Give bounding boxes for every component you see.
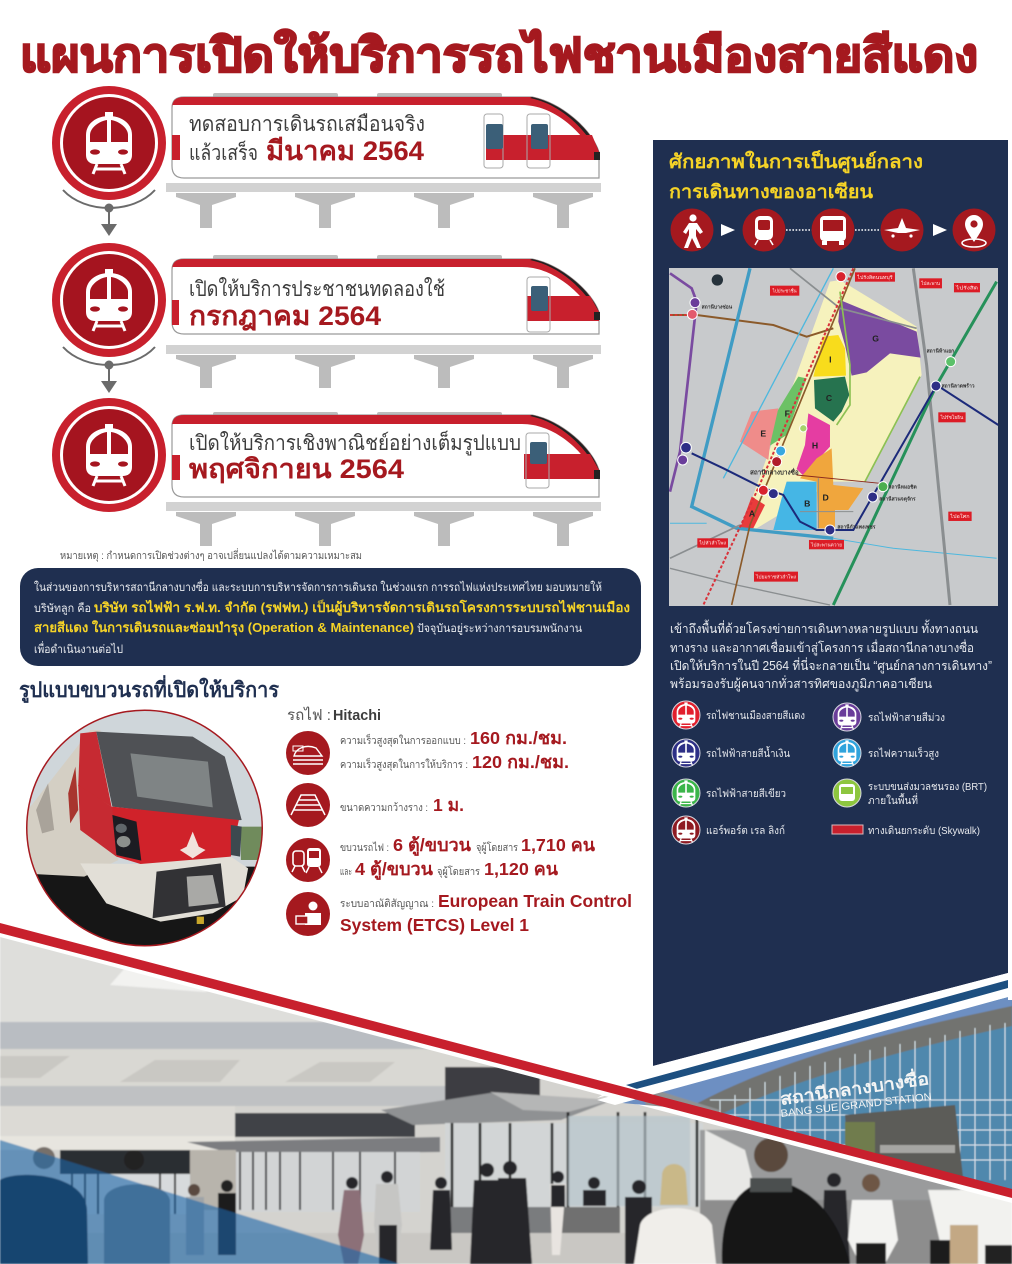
map: station names: สถานีสวนจตุจักร (879, 496, 916, 503)
icon: signalling (286, 892, 330, 936)
legend: airport rail link: แอร์พอร์ต เรล ลิงก์ (706, 824, 785, 837)
heading: train format: รูปแบบขบวนรถที่เปิดให้บริการ (19, 674, 280, 704)
legend (672, 701, 987, 844)
map: station markers (678, 272, 956, 535)
text: carriages (340, 835, 595, 881)
text: hub description: เข้าถึงพื้นที่ด้วยโครงข่ายการเดินทางหลายรูปแบบ ทั้งทางถนน (670, 619, 978, 637)
label: manufacturer: รถไฟ : (287, 706, 331, 724)
panel: operator info: บริษัท รถไฟฟ้า ร.ฟ.ท. จำกัด (รฟฟท.) เป็นผู้บริหารจัดการเดินรถโครงการระบบรถไฟชานเมือง (94, 598, 630, 616)
legend: red line (672, 701, 805, 729)
text: carriages: และ (340, 866, 352, 878)
map: station names: สถานีหมอชิต (888, 483, 917, 490)
legend: BRT: ภายในพื้นที่ (868, 793, 918, 807)
text: speed: 160 กม./ชม. (470, 728, 567, 748)
icon: train (742, 208, 786, 252)
text: signalling: ระบบอาณัติสัญญาณ : (340, 898, 434, 910)
text: station sign: BANG SUE GRAND STATION (780, 1091, 932, 1120)
map: zone letters: F (785, 409, 790, 419)
text: step 1 (189, 113, 425, 166)
legend: green line: รถไฟฟ้าสายสีเขียว (706, 787, 786, 800)
legend: BRT (833, 779, 987, 807)
map: station names: สถานีห้าแยก (927, 347, 954, 354)
label: manufacturer: Hitachi (333, 708, 381, 724)
legend: purple line (833, 703, 945, 731)
text: hub description: พร้อมรองรับผู้คนจากทั่วสารทิศของภูมิภาคอาเซียน (670, 675, 932, 692)
icon: train circle 1 (52, 86, 166, 200)
map: red tags: ไปสะพานควาย (810, 541, 842, 547)
map: zone letters: B (804, 499, 810, 509)
legend: airport rail link (672, 816, 785, 844)
legend: skywalk: ทางเดินยกระดับ (Skywalk) (868, 825, 980, 837)
map: red tags: ไปรังสิตนนทบุรี (856, 274, 893, 281)
map: routes (670, 268, 998, 605)
text: carriages: 1,120 คน (484, 859, 558, 879)
heading: ASEAN hub: ศักยภาพในการเป็นศูนย์กลาง (669, 149, 923, 174)
text: step 2: เปิดให้บริการประชาชนทดลองใช้ (189, 277, 445, 301)
map: red tags: ไปยมราชหัวลำโพง (755, 574, 796, 580)
icon: track (286, 783, 330, 827)
text: step 1: มีนาคม 2564 (266, 136, 424, 166)
label: manufacturer (287, 706, 381, 724)
text: carriages: 4 ตู้/ขบวน (355, 859, 433, 881)
text: hub description (670, 619, 992, 692)
panel: operator info: ปัจจุบันอยู่ระหว่างการอบรมพนักงาน (417, 623, 582, 635)
icon: carriages (286, 838, 330, 882)
map: red tags: ไปประชาชื่น (772, 288, 797, 294)
legend: purple line: รถไฟฟ้าสายสีม่วง (868, 711, 945, 724)
text: carriages: จุผู้โดยสาร (437, 865, 480, 878)
text: signalling (340, 891, 632, 935)
text: speed (340, 728, 569, 772)
photo: blue overlay (0, 1140, 400, 1264)
map: zone letters: D (823, 492, 829, 502)
train 2 (172, 255, 600, 334)
icon: compass (712, 274, 723, 286)
map: project land (740, 280, 922, 530)
text: carriages: 6 ตู้/ขบวน (393, 835, 471, 857)
connector (786, 229, 812, 231)
decorative stripes (597, 130, 1012, 1105)
legend: high speed rail: รถไฟความเร็วสูง (868, 746, 939, 760)
map: red tags: ไปสะพาน (920, 280, 941, 286)
photo: commuters (0, 1138, 1012, 1264)
map: Bang Sue area (669, 268, 998, 606)
text: carriages: จุผู้โดยสาร (476, 841, 518, 854)
text: station sign: สถานีกลางบางซื่อ (778, 1066, 930, 1109)
journey icons (670, 208, 996, 252)
map: zone letters: H (812, 440, 818, 450)
icon: walk (670, 208, 714, 252)
map: station names: สถานีลาดพร้าว (942, 382, 975, 389)
map: zone letters: G (872, 334, 879, 344)
text: gauge: ขนาดความกว้างราง : (340, 802, 428, 814)
text: gauge: 1 ม. (433, 795, 464, 815)
icon: bus (812, 208, 854, 252)
heading: ASEAN hub (669, 149, 923, 203)
map: red tags: ไปรัชโยธิน (940, 414, 964, 420)
map: zone letters: I (829, 354, 832, 364)
text: step 1: ทดสอบการเดินรถเสมือนจริง (189, 113, 425, 136)
viaduct 2 (166, 345, 601, 388)
text: step 3: พฤศจิกายน 2564 (189, 454, 404, 484)
specs: rolling stock (286, 706, 632, 936)
text: hub description: เปิดให้บริการในปี 2564 ที่นี่จะกลายเป็น “ศูนย์กลางการเดินทาง” (670, 657, 992, 674)
viaduct 1 (166, 183, 601, 228)
note: หมายเหตุ : กำหนดการเปิดช่วงต่างๆ อาจเปลี่ยนแปลงได้ตามความเหมาะสม (60, 548, 362, 562)
text: step 2 (189, 277, 445, 331)
connector (855, 229, 881, 231)
panel: operator info: บริษัทลูก คือ (34, 602, 91, 615)
timeline step 3 (52, 398, 601, 546)
panel: navy sidebar (653, 140, 1008, 1066)
red diagonal stripe (0, 923, 1012, 1198)
arrow (721, 224, 735, 236)
legend: blue line: รถไฟฟ้าสายสีน้ำเงิน (706, 746, 790, 760)
text: carriages: 1,710 คน (521, 835, 595, 855)
map: station names (702, 303, 975, 530)
train 3 (172, 412, 600, 497)
map: zone letters: A (749, 509, 756, 519)
text: carriages: ขบวนรถไฟ : (340, 841, 389, 854)
icon: plane (880, 208, 924, 252)
map: red tags: ไปรังสิต (955, 284, 978, 290)
text: speed: ความเร็วสูงสุดในการให้บริการ : (340, 757, 468, 771)
legend: green line (672, 779, 786, 807)
map: red tags: ไปหัวลำโพง (698, 540, 726, 546)
panel: operator info: ในส่วนของการบริหารสถานีกลางบางซื่อ และระบบการบริหารจัดการการเดินรถ ในช่วงแรก การรถไฟแห่งประเทศไทย มอบหมายให้ (34, 579, 602, 594)
arrow: step 2 to 3 (63, 347, 155, 393)
text: step 3: เปิดให้บริการเชิงพาณิชย์อย่างเต็มรูปแบบ (189, 429, 521, 456)
text: station sign (778, 1066, 932, 1120)
photo: train front (26, 710, 263, 946)
map: zone letters: C (826, 393, 833, 403)
viaduct 3 (166, 502, 601, 546)
panel: operator info: สายสีแดง ในการเดินรถและซ่อมบำรุง (Operation & Maintenance) (34, 619, 414, 636)
icon: train circle 3 (52, 398, 166, 512)
panel: operator info: เพื่อดำเนินงานต่อไป (34, 641, 123, 656)
icon: location pin (952, 208, 996, 252)
photo: station facade (600, 997, 1012, 1189)
map: zone letters: E (760, 429, 766, 439)
text: signalling: European Train Control (438, 891, 632, 911)
heading: ASEAN hub: การเดินทางของอาเซียน (669, 181, 873, 203)
map: station names: สถานีกำแพงเพชร (837, 523, 876, 530)
panel: operator info (20, 568, 641, 666)
arrow: step 1 to 2 (63, 190, 155, 236)
text: step 3 (189, 429, 521, 484)
text: hub description: ทางราง และอากาศเชื่อมเข้าสู่โครงการ เมื่อสถานีกลางบางซื่อ (670, 639, 974, 656)
map: red tags: ไปอโศก (949, 513, 970, 519)
legend: high speed rail (833, 739, 939, 767)
timeline step 2 (52, 243, 601, 393)
timeline step 1 (52, 86, 601, 236)
text: step 2: กรกฎาคม 2564 (189, 301, 381, 331)
text: speed: ความเร็วสูงสุดในการออกแบบ : (340, 733, 466, 747)
map: red tags (697, 272, 980, 582)
title: แผนการเปิดให้บริการรถไฟชานเมืองสายสีแดง (20, 28, 978, 81)
icon: speed (286, 731, 330, 775)
train 1 (172, 93, 600, 178)
text: speed: 120 กม./ชม. (472, 752, 569, 772)
map: station names: สถานีบางซ่อน (702, 303, 733, 310)
icon: train circle 2 (52, 243, 166, 357)
text: gauge (340, 795, 464, 815)
map: station names: สถานีกลางบางซื่อ (750, 467, 799, 476)
legend: blue line (672, 739, 790, 767)
photo: station interior (0, 930, 1012, 1264)
text: signalling: System (ETCS) Level 1 (340, 915, 529, 935)
map: zone letters (749, 334, 879, 519)
text: step 1: แล้วเสร็จ (189, 139, 258, 165)
legend: BRT: ระบบขนส่งมวลชนรอง (BRT) (868, 781, 987, 793)
arrow (933, 224, 947, 236)
legend: red line: รถไฟชานเมืองสายสีแดง (706, 709, 805, 722)
